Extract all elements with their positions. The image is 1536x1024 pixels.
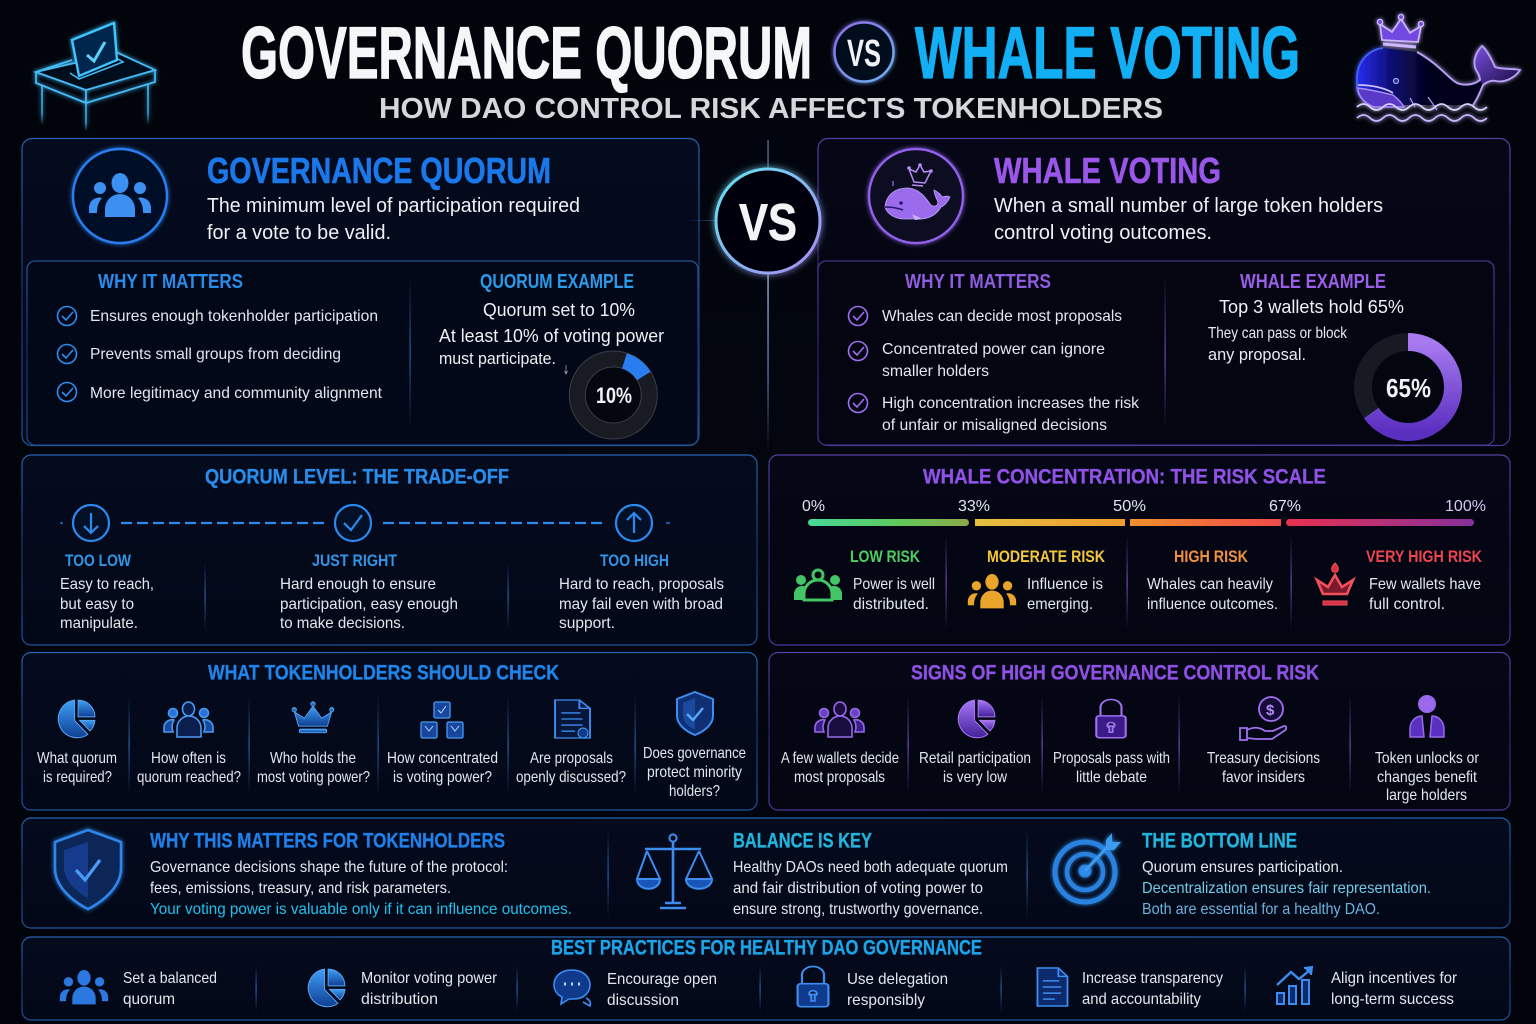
panel: whale voting	[818, 138, 1510, 446]
practice: delegation	[798, 966, 948, 1009]
heading: SIGNS OF HIGH GOVERNANCE CONTROL RISK	[911, 662, 1319, 684]
the bottom line: Decentralization ensures fair representation.	[1142, 880, 1431, 897]
sign: token unlocks: changes benefit	[1377, 769, 1477, 786]
check: minority protection: protect minority	[647, 764, 742, 781]
practice: incentives: Align incentives for	[1331, 970, 1458, 987]
practice: delegation: responsibly	[847, 992, 925, 1009]
sub-panel: why it matters and whale example	[818, 261, 1494, 445]
checklist: Whales can decide most proposals	[882, 308, 1122, 325]
heading: BEST PRACTICES FOR HEALTHY DAO GOVERNANCE	[551, 936, 982, 960]
practice: delegation: Use delegation	[847, 971, 948, 988]
checklist: More legitimacy and community alignment	[90, 385, 383, 402]
practice: balanced quorum: quorum	[123, 991, 175, 1008]
just right: participation, easy enough	[280, 596, 458, 613]
check: quorum reached: How often is	[151, 750, 226, 767]
check: concentration	[387, 702, 498, 786]
sign: token unlocks	[1375, 695, 1480, 804]
center vs divider	[685, 140, 820, 452]
panel: quorum trade-off	[22, 455, 757, 645]
moderate risk: MODERATE RISK	[987, 547, 1106, 566]
donut: 10%	[564, 351, 657, 439]
practice: incentives	[1277, 967, 1458, 1008]
check: minority protection: holders?	[669, 783, 720, 800]
checklist: Concentrated power can ignore	[882, 341, 1105, 358]
practice: incentives: long-term success	[1331, 991, 1454, 1008]
just right: JUST RIGHT	[312, 551, 398, 570]
whale example: They can pass or block	[1208, 325, 1348, 342]
definition: quorum: for a vote to be valid.	[207, 222, 391, 244]
panel: governance quorum	[22, 138, 699, 446]
heading: why it matters: WHY IT MATTERS	[905, 271, 1051, 293]
why this matters: fees, emissions, treasury, and risk parameters.	[150, 880, 451, 897]
check: quorum required: is required?	[43, 769, 112, 786]
sub-panel: why it matters and example	[27, 261, 698, 445]
sign: treasury	[1207, 697, 1320, 786]
why this matters: WHY THIS MATTERS FOR TOKENHOLDERS	[150, 830, 505, 852]
balance is key: ensure strong, trustworthy governance.	[733, 901, 983, 918]
sign: treasury: favor insiders	[1222, 769, 1305, 786]
scale labels	[802, 498, 1486, 515]
just right: to make decisions.	[280, 615, 405, 632]
scale labels: 67%	[1269, 498, 1301, 515]
just right: Hard enough to ensure	[280, 576, 436, 593]
check: proposals discussed: openly discussed?	[516, 769, 626, 786]
too high: Hard to reach, proposals	[559, 576, 724, 593]
check: minority protection	[643, 692, 746, 800]
definition: quorum	[207, 195, 580, 244]
scale labels: 0%	[802, 498, 825, 515]
sign: few wallets: A few wallets decide	[781, 750, 899, 767]
sign: token unlocks: Token unlocks or	[1375, 750, 1480, 767]
heading: why it matters: WHY IT MATTERS	[98, 271, 243, 293]
practice: transparency: Increase transparency	[1082, 970, 1223, 987]
checklist: Prevents small groups from deciding	[90, 346, 341, 363]
checklist: smaller holders	[882, 363, 989, 380]
check: quorum reached: quorum reached?	[137, 769, 241, 786]
center vs divider: VS	[739, 194, 797, 252]
icon: scales	[637, 834, 712, 908]
sign: few wallets: most proposals	[794, 769, 885, 786]
donut: 65%	[1363, 342, 1453, 432]
heading: WHAT TOKENHOLDERS SHOULD CHECK	[208, 662, 559, 684]
quorum example	[439, 271, 664, 368]
sign: treasury: Treasury decisions	[1207, 750, 1320, 767]
panel: what tokenholders should check	[22, 652, 757, 810]
checklist	[848, 306, 1140, 434]
check: voting power holders	[257, 702, 370, 786]
too low	[60, 551, 154, 632]
balance is key: BALANCE IS KEY	[733, 830, 872, 852]
very high risk: VERY HIGH RISK	[1366, 547, 1483, 566]
whale example: Top 3 wallets hold 65%	[1219, 297, 1404, 317]
too low: manipulate.	[60, 615, 138, 632]
vs badge small: VS	[847, 33, 881, 75]
sign: little debate: little debate	[1076, 769, 1147, 786]
too high: may fail even with broad	[559, 596, 723, 613]
quorum example: Quorum set to 10%	[483, 300, 635, 320]
checklist: High concentration increases the risk	[882, 395, 1140, 412]
checklist: of unfair or misaligned decisions	[882, 417, 1107, 434]
too low: Easy to reach,	[60, 576, 154, 593]
moderate risk	[968, 547, 1106, 613]
very high risk	[1317, 547, 1483, 613]
low risk: distributed.	[853, 596, 929, 613]
panel: signs of high governance control risk	[769, 652, 1510, 810]
practice: balanced quorum: Set a balanced	[123, 970, 217, 987]
sign: token unlocks: large holders	[1386, 787, 1467, 804]
high risk: Whales can heavily	[1147, 576, 1273, 593]
balance is key: Healthy DAOs need both adequate quorum	[733, 859, 1008, 876]
check: minority protection: Does governance	[643, 745, 746, 762]
quorum example: must participate.	[439, 349, 556, 368]
scale labels: 100%	[1445, 498, 1486, 515]
check: quorum required	[37, 700, 117, 786]
panel: why this matters, balance, bottom line	[22, 818, 1510, 928]
too high	[559, 551, 724, 632]
risk scale bar	[808, 519, 1474, 526]
practice: monitor distribution	[308, 969, 498, 1008]
very high risk: full control.	[1369, 596, 1445, 613]
practice: transparency	[1037, 968, 1223, 1008]
icon: whale circle	[869, 149, 963, 243]
check: proposals discussed	[516, 700, 626, 786]
too low: TOO LOW	[65, 551, 132, 570]
heading: WHALE CONCENTRATION: THE RISK SCALE	[923, 466, 1326, 488]
low risk: Power is well	[853, 576, 935, 593]
timeline	[60, 505, 670, 541]
check: concentration: How concentrated	[387, 750, 498, 767]
practice: balanced quorum	[60, 970, 217, 1008]
heading: governance quorum: GOVERNANCE QUORUM	[207, 150, 551, 191]
definition: whale voting	[994, 195, 1383, 244]
too high: support.	[559, 615, 615, 632]
whale example: WHALE EXAMPLE	[1240, 271, 1386, 293]
high risk	[1147, 547, 1278, 613]
the bottom line: Both are essential for a healthy DAO.	[1142, 901, 1380, 918]
moderate risk: emerging.	[1027, 596, 1093, 613]
the bottom line	[1142, 830, 1431, 918]
check: quorum required: What quorum	[37, 750, 117, 767]
practice: open discussion: Encourage open	[607, 971, 717, 988]
checklist	[58, 306, 383, 402]
definition: whale voting: control voting outcomes.	[994, 222, 1212, 244]
scale labels: 50%	[1113, 498, 1146, 515]
too high: TOO HIGH	[600, 551, 669, 570]
sign: few wallets	[781, 702, 899, 786]
subtitle: HOW DAO CONTROL RISK AFFECTS TOKENHOLDERS	[379, 93, 1163, 125]
practice: monitor distribution: distribution	[361, 991, 438, 1008]
high risk: influence outcomes.	[1147, 596, 1278, 613]
definition: quorum: The minimum level of participation required	[207, 195, 580, 217]
very high risk: Few wallets have	[1369, 576, 1481, 593]
title: WHALE VOTING	[915, 13, 1300, 94]
icon: target	[1055, 833, 1121, 902]
check: concentration: is voting power?	[393, 769, 492, 786]
sign: little debate	[1053, 700, 1170, 786]
title: GOVERNANCE QUORUM	[241, 13, 812, 94]
the bottom line: THE BOTTOM LINE	[1142, 830, 1297, 852]
icon: whale with crown	[1357, 14, 1520, 121]
check: proposals discussed: Are proposals	[530, 750, 613, 767]
practice: open discussion	[554, 970, 717, 1009]
low risk	[794, 547, 935, 613]
icon: people circle	[73, 149, 167, 243]
sign: retail participation	[919, 700, 1031, 786]
sign: treasury: $	[1266, 702, 1275, 719]
sign: retail participation: Retail participation	[919, 750, 1031, 767]
balance is key	[733, 830, 1008, 918]
donut: 65%: 65%	[1386, 373, 1431, 403]
low risk: LOW RISK	[850, 547, 921, 566]
panel: best practices	[22, 936, 1510, 1020]
balance is key: and fair distribution of voting power to	[733, 880, 983, 897]
donut: 10%: 10%	[596, 383, 632, 408]
heading: whale voting: WHALE VOTING	[994, 150, 1221, 191]
high risk: HIGH RISK	[1174, 547, 1249, 566]
practice: transparency: and accountability	[1082, 991, 1201, 1008]
definition: whale voting: When a small number of large token holders	[994, 195, 1383, 217]
scale labels: 33%	[958, 498, 990, 515]
quorum example: QUORUM EXAMPLE	[480, 271, 634, 293]
whale example	[1208, 271, 1404, 364]
sign: retail participation: is very low	[943, 769, 1007, 786]
sign: little debate: Proposals pass with	[1053, 750, 1170, 767]
heading: QUORUM LEVEL: THE TRADE-OFF	[205, 466, 509, 488]
moderate risk: Influence is	[1027, 576, 1103, 593]
quorum example: At least 10% of voting power	[439, 326, 664, 346]
checklist: Ensures enough tokenholder participation	[90, 308, 378, 325]
the bottom line: Quorum ensures participation.	[1142, 859, 1343, 876]
panel: whale concentration	[769, 455, 1510, 645]
too low: but easy to	[60, 596, 134, 613]
check: voting power holders: most voting power?	[257, 769, 370, 786]
just right	[280, 551, 458, 632]
icon: ballot box	[36, 23, 155, 131]
why this matters: Governance decisions shape the future of the protocol:	[150, 859, 508, 876]
whale example: any proposal.	[1208, 345, 1306, 364]
practice: open discussion: discussion	[607, 992, 679, 1009]
check: quorum reached	[137, 702, 241, 786]
vs badge small	[834, 22, 894, 82]
why this matters	[150, 830, 572, 918]
check: voting power holders: Who holds the	[270, 750, 356, 767]
icon: shield	[55, 830, 121, 909]
why this matters: Your voting power is valuable only if it can influence outcomes.	[150, 901, 572, 918]
practice: monitor distribution: Monitor voting power	[361, 970, 498, 987]
